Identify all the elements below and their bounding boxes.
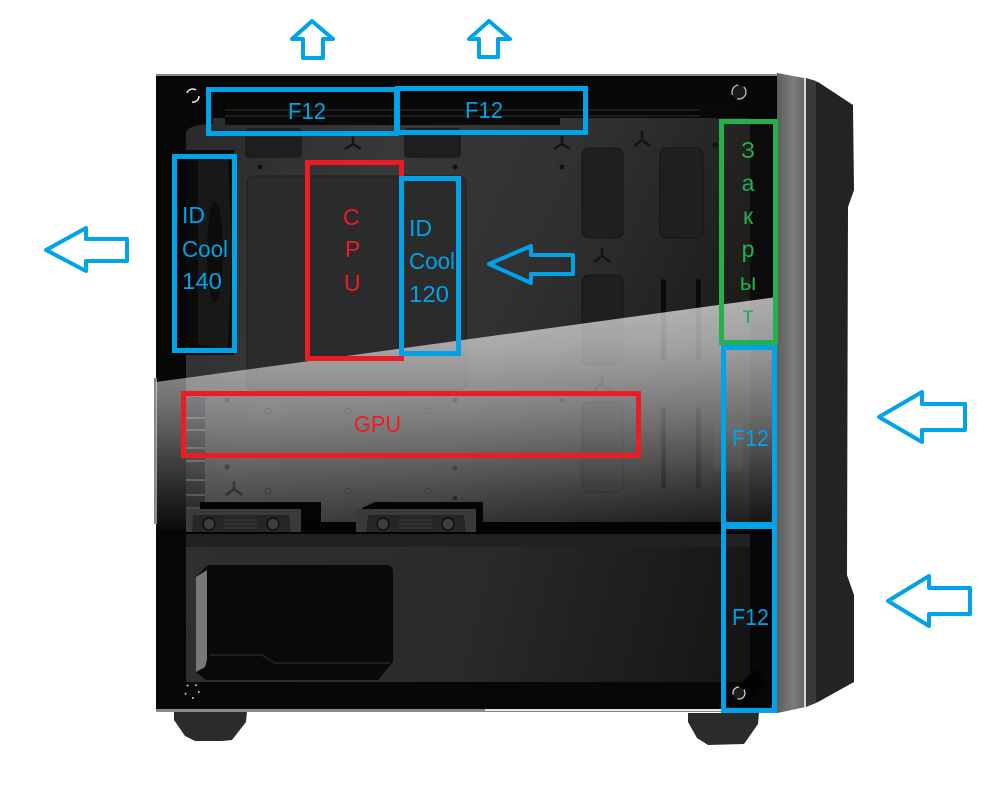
vent lines — [225, 110, 700, 116]
bottom right screw ring — [733, 687, 745, 699]
GPU box — [184, 394, 638, 456]
hdd cage back 2 — [362, 502, 483, 522]
closed front section: а — [742, 170, 755, 196]
fan label: ID Cool 120: ID — [409, 215, 432, 241]
fan label: front F12 upper: F12 — [732, 425, 769, 451]
closed front section: З — [741, 137, 755, 163]
slots — [661, 279, 701, 488]
corner screw top left — [187, 89, 199, 102]
corner screw bottom right diamond — [733, 668, 766, 705]
fan label: ID Cool 120 — [402, 178, 458, 354]
fan label: ID Cool 140 — [174, 156, 234, 350]
screw holes — [224, 142, 718, 500]
rear fan — [186, 150, 234, 355]
fan hub — [207, 202, 223, 302]
Y marks — [226, 131, 650, 495]
fan label: top F12 left: F12 — [288, 98, 326, 124]
left sliver — [154, 378, 157, 524]
PC case photo — [154, 73, 854, 745]
psu silver sliver — [196, 570, 207, 672]
GPU box: GPU — [354, 411, 401, 437]
expansion vents — [186, 397, 205, 507]
fan label: ID Cool 140: ID — [182, 202, 205, 228]
corner screw bottom left — [185, 684, 199, 698]
corner screw top right — [732, 85, 746, 99]
arrow: front intake lower — [888, 576, 970, 626]
fan label: ID Cool 140: Cool — [182, 236, 228, 262]
closed front section: р — [742, 236, 754, 262]
shroud band — [186, 534, 750, 547]
arrow: top exhaust 1 — [292, 21, 333, 58]
hdd cage back 1 — [200, 502, 321, 522]
side metal strip — [777, 73, 804, 713]
arrow: cpu cooler airflow — [489, 246, 573, 283]
psu bracket — [210, 655, 390, 663]
fan label: front F12 upper — [724, 348, 774, 524]
reflection — [156, 297, 777, 530]
fan label: ID Cool 140: 140 — [182, 268, 222, 294]
fan label: top F12 left — [208, 90, 396, 134]
CPU box: P — [345, 236, 360, 262]
fan label: ID Cool 120: 120 — [409, 281, 449, 307]
strip white highlight — [804, 78, 806, 707]
closed front section — [722, 122, 776, 342]
psu shroud — [186, 547, 750, 682]
fan blades — [198, 155, 232, 350]
CPU box: C — [343, 204, 360, 230]
fan label: ID Cool 120: Cool — [409, 248, 455, 274]
CPU box — [308, 162, 402, 358]
motherboard panel — [186, 118, 750, 525]
foot left — [174, 711, 247, 741]
arrow: front intake upper — [879, 392, 965, 442]
standoff rings — [265, 408, 431, 494]
bottom edge highlight — [156, 709, 777, 712]
right dark column — [750, 118, 777, 530]
foot right — [688, 713, 759, 745]
closed front section: к — [743, 203, 754, 229]
cable cutouts — [582, 148, 743, 492]
fan label: top F12 right — [398, 88, 586, 132]
arrow: rear exhaust — [46, 228, 127, 271]
psu cutout — [196, 565, 393, 680]
upper tabs — [245, 128, 461, 158]
vent separators — [186, 418, 205, 495]
case rear shell — [777, 73, 854, 713]
glass base — [156, 75, 777, 711]
top vent band — [225, 103, 748, 125]
arrow: top exhaust 2 — [469, 21, 510, 57]
top edge highlight — [156, 74, 777, 76]
closed front section: т — [743, 302, 754, 328]
closed front section: ы — [740, 269, 756, 295]
hdd cage 1 — [186, 509, 301, 532]
fan label: front F12 lower: F12 — [732, 604, 769, 630]
bottom white edge — [485, 709, 721, 711]
strip secondary band — [806, 78, 816, 707]
dark lower area — [186, 522, 777, 534]
fan label: front F12 lower — [724, 526, 774, 710]
hdd cage 2 — [356, 509, 476, 532]
CPU box: U — [344, 270, 361, 296]
cpu cutout — [247, 176, 466, 390]
fan label: top F12 right: F12 — [465, 97, 503, 123]
